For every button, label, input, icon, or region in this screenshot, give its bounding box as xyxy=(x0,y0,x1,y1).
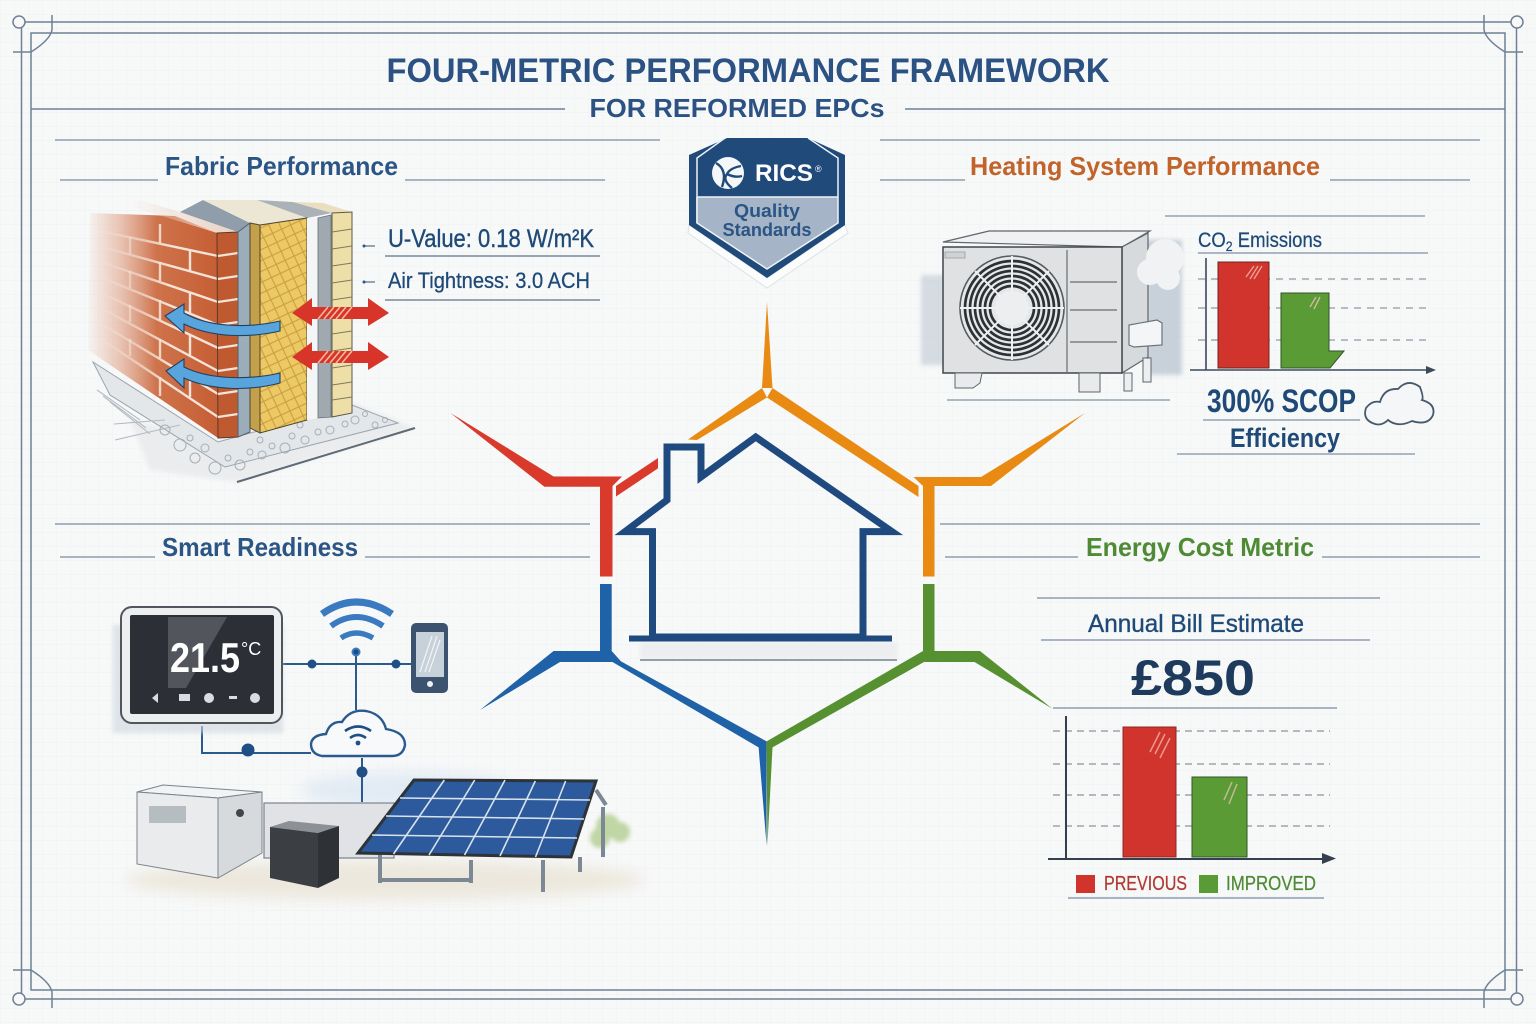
solar panel xyxy=(358,780,606,892)
fan grille xyxy=(960,256,1064,360)
icon: wifi signal xyxy=(322,602,392,656)
hexagon arm: orange heating xyxy=(688,302,1085,576)
icon: cloud xyxy=(1365,383,1434,424)
metric: bill amount: £850 xyxy=(1131,650,1255,706)
ground slab and gravel xyxy=(93,362,415,482)
connection lines xyxy=(202,653,411,802)
heading: smart readiness: Smart Readiness xyxy=(162,532,358,562)
label: CO2 emissions xyxy=(1165,216,1428,254)
illustration: wall cross-section xyxy=(88,200,415,482)
badge: RICS quality standards xyxy=(688,138,848,288)
heading: fabric performance xyxy=(55,140,660,181)
heading: energy cost metric: Energy Cost Metric xyxy=(1086,532,1314,562)
ground wash xyxy=(125,772,645,900)
legend xyxy=(1068,873,1324,898)
panel: fabric performance xyxy=(55,140,660,482)
steam puff xyxy=(1137,239,1184,290)
bar chart: annual bill xyxy=(1048,716,1336,864)
bar chart: CO2 xyxy=(1190,258,1436,374)
label: air tightness xyxy=(362,268,600,300)
label: annual bill estimate xyxy=(1037,598,1380,640)
title: FOUR-METRIC PERFORMANCE FRAMEWORK xyxy=(386,52,1110,90)
legend swatch: previous xyxy=(1076,875,1095,893)
battery and inverter xyxy=(137,785,394,888)
heading: heating system performance xyxy=(880,140,1480,181)
panel: heating system performance xyxy=(880,140,1480,454)
hexagon arm: green cost xyxy=(767,584,1052,846)
thermostat xyxy=(113,607,283,733)
inner leaf xyxy=(307,212,352,420)
blue heat arrows xyxy=(165,304,280,388)
label: annual bill estimate: Annual Bill Estimate xyxy=(1088,610,1304,638)
metric: efficiency: Efficiency xyxy=(1230,423,1340,453)
subtitle: FOR REFORMED EPCs xyxy=(590,93,884,123)
icon: RICS globe xyxy=(712,157,744,189)
badge caption line two: Standards xyxy=(722,220,812,240)
icon: cloud with wifi xyxy=(311,711,405,756)
red double arrows xyxy=(292,298,389,370)
label: CO2 emissions: Emissions xyxy=(1233,229,1322,252)
panel: smart readiness xyxy=(55,524,645,900)
badge caption: Quality xyxy=(734,201,800,221)
legend label: improved: IMPROVED xyxy=(1226,873,1316,895)
illustration: heat pump xyxy=(920,231,1184,400)
heading: energy cost metric xyxy=(940,524,1480,562)
registered mark: ® xyxy=(815,164,822,174)
insulation layer xyxy=(250,218,307,433)
hexagon arm: red fabric xyxy=(450,413,658,576)
thermostat buttons xyxy=(152,693,260,703)
legend label: previous: PREVIOUS xyxy=(1104,873,1187,895)
badge wordmark: RICS xyxy=(755,160,813,187)
label: air tightness: Air Tightness: 3.0 ACH xyxy=(388,268,590,293)
label: u-value: U-Value: 0.18 W/m²K xyxy=(388,225,594,253)
icon: smartphone xyxy=(411,623,448,693)
house outline xyxy=(625,437,898,660)
panel: energy cost metric xyxy=(940,524,1480,898)
legend swatch: improved xyxy=(1199,875,1218,893)
metric: SCOP: 300% SCOP xyxy=(1207,383,1356,419)
hexagon arm: blue smart xyxy=(480,584,767,846)
diagram: central hexagon and house xyxy=(450,302,1085,846)
heading: heating system performance: Heating System Performance xyxy=(970,151,1320,181)
heading: fabric performance: Fabric Performance xyxy=(165,151,398,181)
brick outer leaf xyxy=(88,200,238,438)
label: CO2 emissions: CO xyxy=(1198,229,1230,252)
heading: smart readiness xyxy=(55,524,590,562)
thermostat reading: 21.5 xyxy=(170,634,240,681)
label: CO2 emissions: 2 xyxy=(1226,238,1233,254)
connection nodes xyxy=(242,660,400,778)
thermostat unit: °C xyxy=(241,639,261,659)
cavity and layers xyxy=(180,200,352,437)
